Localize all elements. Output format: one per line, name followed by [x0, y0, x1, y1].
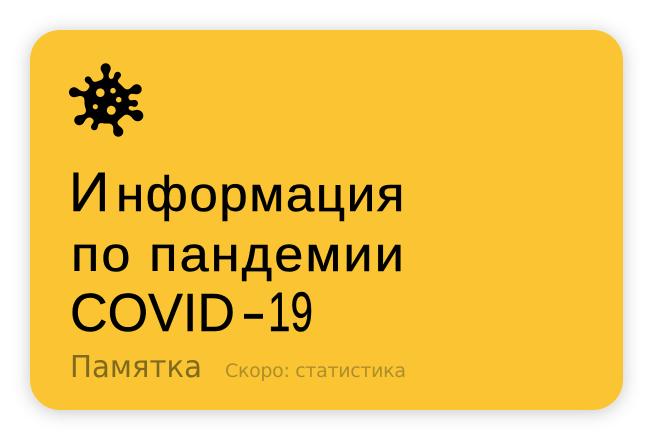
title: 19	[268, 280, 313, 343]
title: COVID	[70, 283, 235, 343]
icon: virus	[69, 63, 144, 137]
panel: yellow card	[30, 30, 623, 410]
title: нформация	[116, 168, 406, 222]
title: по пандемии	[71, 228, 406, 282]
subtitle: Памятка: Памятка	[70, 350, 202, 385]
note: coming soon statistics: Скоро: статистика	[225, 360, 406, 382]
title: И	[69, 160, 109, 223]
title: -	[241, 280, 266, 343]
title	[69, 160, 406, 343]
